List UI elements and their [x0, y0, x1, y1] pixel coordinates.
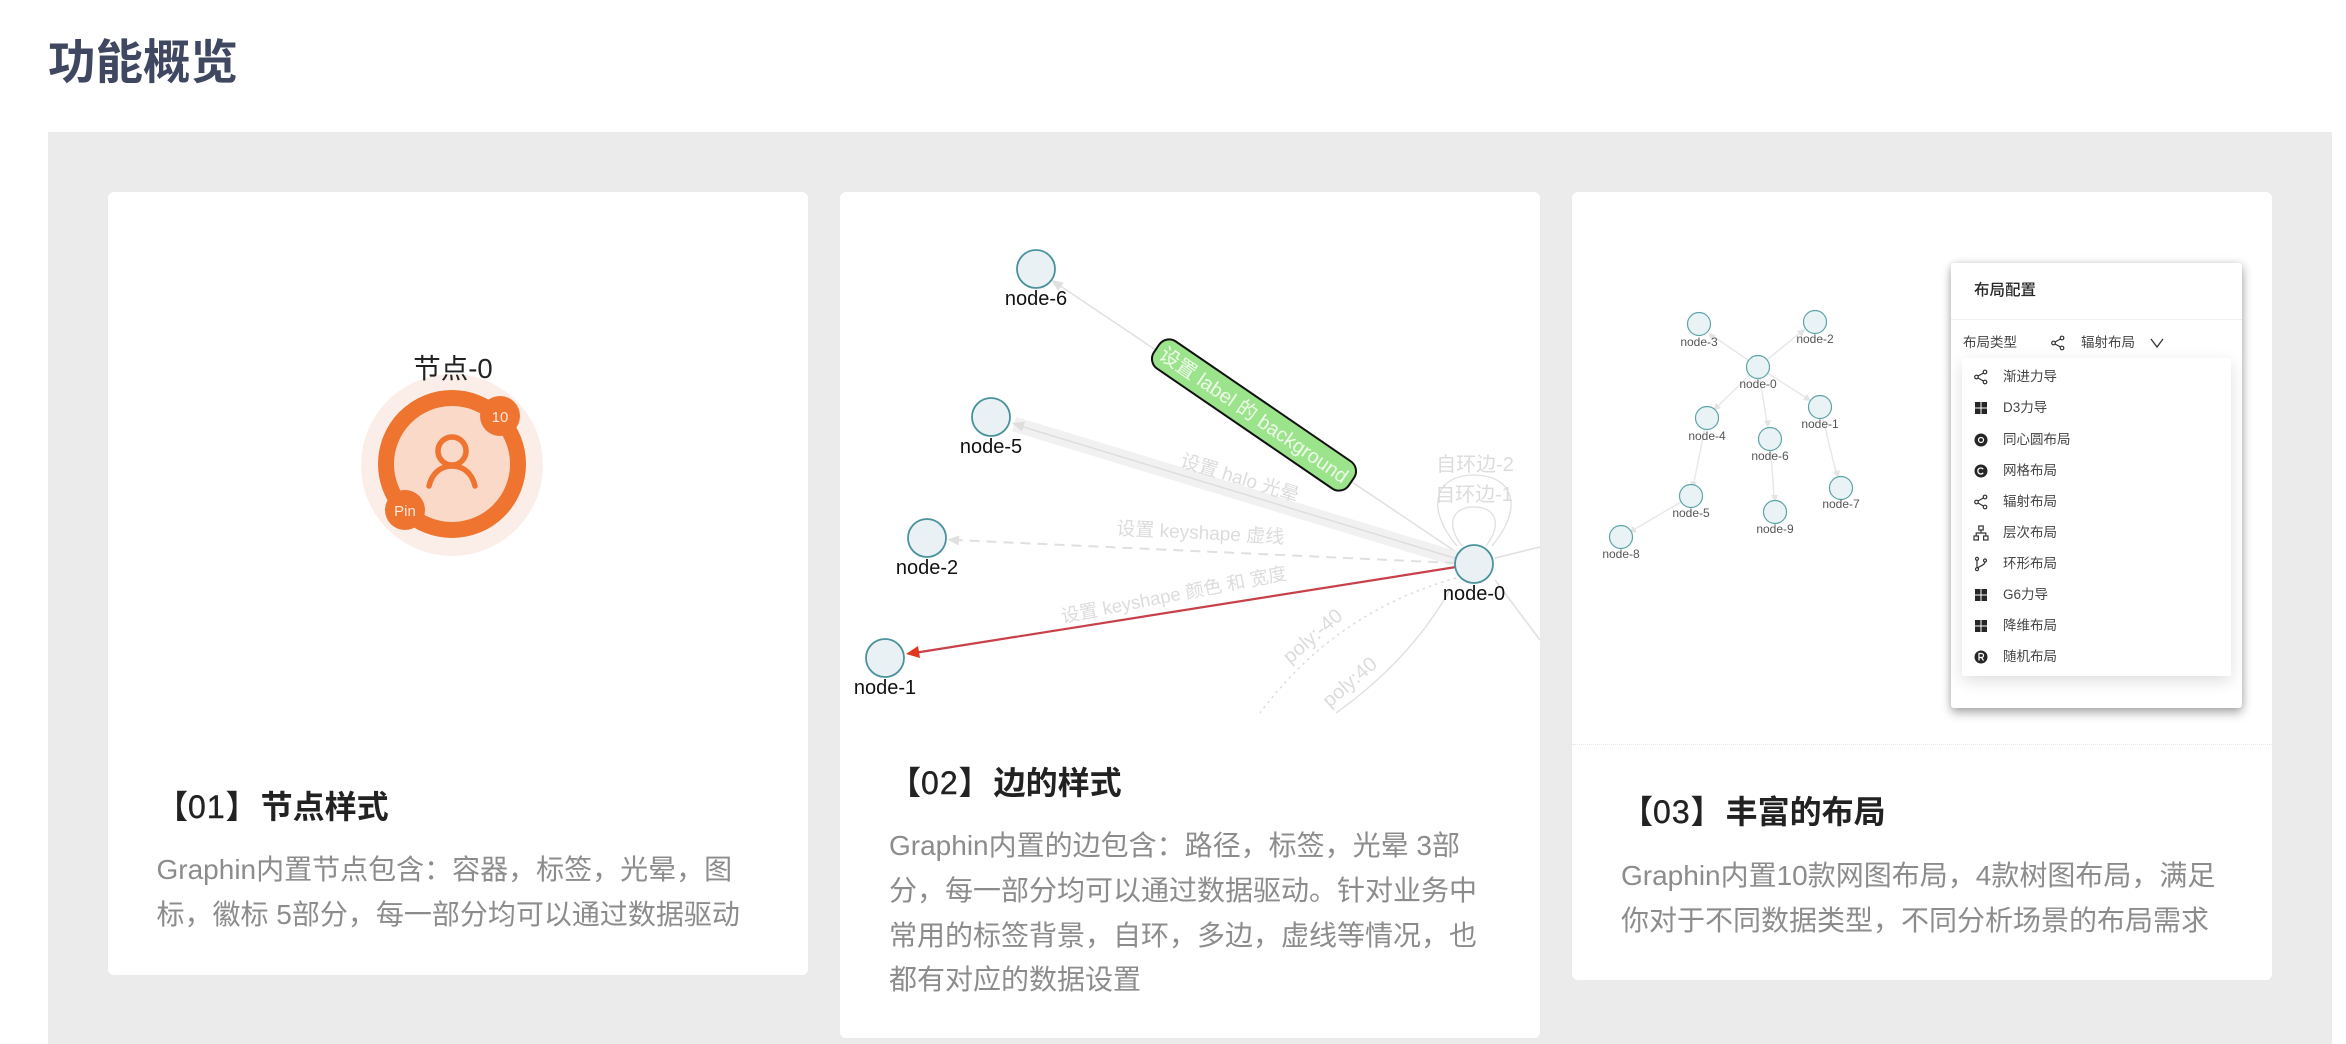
- node-2: node-2: [1796, 332, 1834, 346]
- panel: card 01 node style: [108, 192, 808, 975]
- node-8: [1602, 526, 1640, 561]
- item: d3 force: D3力导: [2003, 400, 2047, 415]
- node-5: node-5: [1672, 506, 1710, 520]
- edge label: background: 设置 label 的 background: [1155, 343, 1352, 488]
- dropdown menu: [1962, 358, 2231, 676]
- item: random: 随机布局: [2003, 649, 2057, 664]
- item: grid: [1974, 463, 2057, 478]
- edge label: dashed: 设置 keyshape 虚线: [1116, 518, 1285, 548]
- node halo: [361, 374, 543, 556]
- node-6: [1005, 250, 1067, 310]
- node-2: [1796, 310, 1834, 346]
- chart: edge styles graph: [854, 249, 1540, 714]
- edge: self loops: [1438, 475, 1511, 546]
- edge: to the right: [1495, 547, 1540, 640]
- edge label: poly 40: poly:40: [1319, 653, 1382, 712]
- edge: background label to node-6: [1051, 280, 1474, 564]
- icon: user: [429, 437, 475, 486]
- description: 分，每一部分均可以通过数据驱动。针对业务中: [889, 875, 1477, 906]
- node-4: node-4: [1688, 429, 1726, 443]
- item: progressive force: [1974, 369, 2057, 384]
- node-6: node-6: [1005, 288, 1067, 310]
- node-9: [1756, 500, 1794, 536]
- description: [1621, 860, 2215, 936]
- node-7: [1822, 476, 1860, 511]
- node-3: [1680, 312, 1718, 349]
- node-5: [1672, 484, 1710, 520]
- node-4: [1688, 406, 1726, 443]
- node-0: [1443, 545, 1505, 605]
- node keyshape: [386, 398, 518, 530]
- edge: halo to node-5: [1012, 422, 1474, 564]
- item: concentric: 同心圆布局: [2003, 432, 2070, 447]
- edge: dashed to node-2: [947, 536, 1455, 563]
- description: Graphin内置节点包含：容器，标签，光晕，图: [156, 854, 732, 885]
- item: circular: [1974, 556, 2057, 572]
- item: progressive force: 渐进力导: [2003, 369, 2057, 384]
- node-6: node-6: [1751, 449, 1789, 463]
- chart: tree layout graph: [1602, 310, 1860, 561]
- node-2: node-2: [896, 557, 958, 579]
- item: random: [1974, 649, 2057, 664]
- node-3: node-3: [1680, 335, 1718, 349]
- node-8: node-8: [1602, 547, 1640, 561]
- node label: 节点-0: [413, 353, 493, 384]
- item: radial: [1974, 494, 2057, 510]
- node-6: [1751, 428, 1789, 463]
- node-1: node-1: [1801, 417, 1839, 431]
- panel: layout config: [1951, 263, 2242, 708]
- item: d3 force: [1975, 400, 2047, 415]
- badge: pin: [385, 490, 425, 530]
- heading: 【02】边的样式: [889, 765, 1122, 801]
- description: 常用的标签背景，自环，多边，虚线等情况，也: [889, 920, 1477, 951]
- item: radial: 辐射布局: [2003, 494, 2057, 509]
- description: [156, 854, 740, 930]
- heading: 【01】节点样式: [156, 789, 389, 825]
- heading: 【03】丰富的布局: [1621, 794, 1886, 830]
- item: g6 force: G6力导: [2003, 587, 2048, 602]
- edge label: poly -40: poly:-40: [1279, 605, 1347, 668]
- badge: count: 10: [492, 409, 508, 426]
- edge label: colour and width: 设置 keyshape 颜色 和 宽度: [1059, 562, 1288, 627]
- edge: solid poly: [1336, 590, 1450, 713]
- description: 你对于不同数据类型，不同分析场景的布局需求: [1621, 905, 2209, 936]
- node-5: [960, 398, 1022, 458]
- item: mds: [1975, 618, 2057, 633]
- edge label: halo: 设置 halo 光晕: [1178, 450, 1302, 507]
- icon: share: [2051, 336, 2064, 350]
- node-1: node-1: [854, 677, 916, 699]
- description: [889, 830, 1477, 995]
- item: circular: 环形布局: [2003, 556, 2057, 571]
- title: 功能概览: [48, 37, 238, 90]
- current value: 辐射布局: [2081, 335, 2135, 350]
- panel: card 02 edge style: [840, 192, 1540, 1038]
- edges: [1629, 329, 1840, 533]
- node-7: node-7: [1822, 497, 1860, 511]
- node-0: node-0: [1443, 583, 1505, 605]
- label: layout type: 布局类型: [1963, 335, 2017, 350]
- node-1: [854, 639, 916, 699]
- description: 都有对应的数据设置: [889, 964, 1141, 995]
- item: g6 force: [1975, 587, 2048, 602]
- item: mds: 降维布局: [2003, 618, 2057, 633]
- description: Graphin内置的边包含：路径，标签，光晕 3部: [889, 830, 1460, 861]
- badge: pin: Pin: [394, 503, 416, 520]
- node-1: [1801, 396, 1839, 431]
- description: Graphin内置10款网图布局，4款树图布局，满足: [1621, 860, 2215, 891]
- item: grid: 网格布局: [2003, 463, 2057, 478]
- edge: dotted poly: [1260, 578, 1456, 713]
- edge label: self loop 2: 自环边-2: [1436, 453, 1514, 476]
- node-0: [1739, 356, 1777, 391]
- config title: 布局配置: [1974, 282, 2036, 299]
- node-5: node-5: [960, 436, 1022, 458]
- edge: red to node-1: [906, 567, 1456, 658]
- item: dagre: 层次布局: [2003, 525, 2057, 540]
- chart: node anatomy: [361, 353, 543, 556]
- panel: card 03 layouts: [1572, 192, 2272, 980]
- node-9: node-9: [1756, 522, 1794, 536]
- badge: count: [480, 396, 520, 436]
- item: dagre: [1973, 525, 2057, 541]
- node-2: [896, 519, 958, 579]
- description: 标，徽标 5部分，每一部分均可以通过数据驱动: [156, 899, 740, 930]
- edge label: self loop 1: 自环边-1: [1435, 483, 1513, 506]
- icon: chevron: [2150, 338, 2164, 348]
- node-0: node-0: [1739, 377, 1777, 391]
